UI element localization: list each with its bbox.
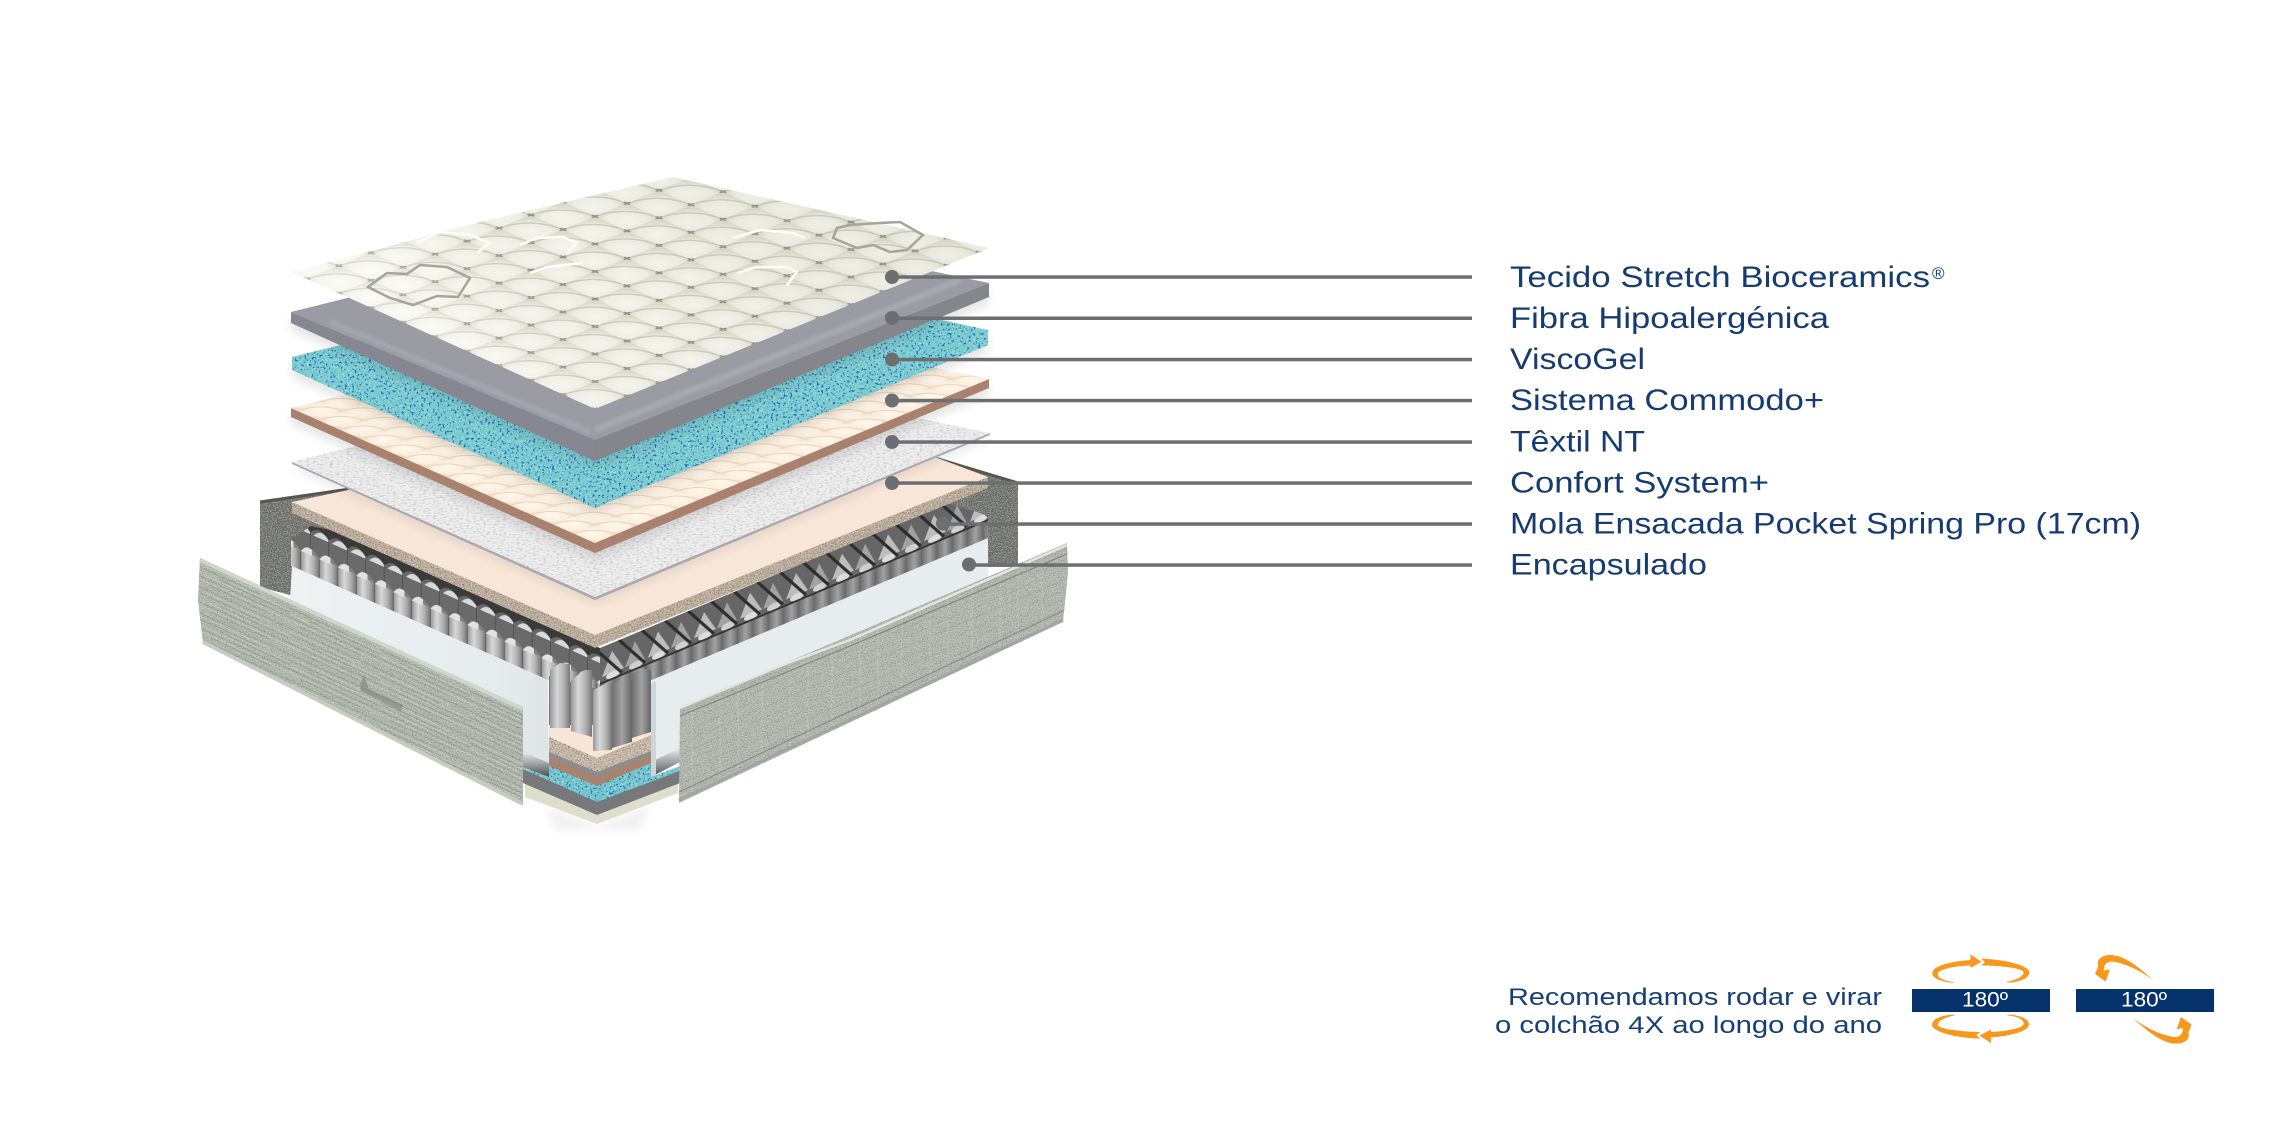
core brown layer — [549, 753, 651, 786]
base grey layer — [523, 769, 680, 815]
rotation recommendation text: Recomendamos rodar e virar — [1508, 984, 1882, 1011]
label: Fibra Hipoalergénica: Fibra Hipoalergénica — [1510, 302, 1829, 335]
label: ViscoGel: ViscoGel — [1510, 343, 1645, 376]
layer: Sistema Commodo+ — [291, 313, 989, 560]
label: Confort System+: Confort System+ — [1510, 466, 1769, 500]
rotate icon: horizontal 180: 180º — [1962, 988, 2008, 1012]
layer: ViscoGel — [292, 262, 988, 515]
encapsulation white left — [290, 566, 549, 777]
label: Sistema Commodo+: Sistema Commodo+ — [1510, 384, 1824, 417]
layer: Fibra Hipoalergénica — [291, 217, 989, 468]
rotate icon: horizontal 180 — [1912, 955, 2050, 1042]
leader lines and dots — [885, 270, 1472, 572]
back wall right — [935, 458, 1018, 567]
rotation recommendation text: o colchão 4X ao longo do ano — [1495, 1012, 1882, 1039]
rotation recommendation text — [1495, 984, 1882, 1039]
label: Tecido Stretch Bioceramics: ® — [1932, 264, 1945, 283]
brand mark — [360, 675, 403, 711]
back wall left — [260, 488, 350, 596]
layer labels — [1510, 261, 2141, 582]
spring band right — [600, 503, 988, 700]
spring band left — [291, 526, 600, 700]
core foam grain — [549, 734, 651, 772]
base teal layer — [523, 761, 680, 802]
core grey line — [549, 749, 651, 777]
flip icon: vertical 180: 180º — [2121, 988, 2167, 1012]
bottom shadow — [545, 805, 650, 830]
quilting ornaments — [368, 222, 923, 305]
flip icon: vertical 180 — [2076, 955, 2214, 1044]
base cream layer — [525, 783, 678, 824]
side fabric panel left — [198, 558, 523, 805]
layer: Têxtil NT — [292, 367, 990, 604]
layer: Confort System+ — [292, 400, 988, 648]
label: Têxtil NT: Têxtil NT — [1510, 426, 1645, 458]
side fabric panel right — [679, 543, 1068, 803]
mattress illustration — [198, 177, 1068, 830]
cut-away springs — [549, 663, 651, 751]
core foam top — [549, 720, 651, 758]
label: Mola Ensacada Pocket Spring Pro: Mola Ensacada Pocket Spring Pro (17cm) — [1510, 508, 2141, 540]
layer: Tecido Stretch Bioceramics — [292, 177, 989, 409]
encapsulation white right — [651, 538, 988, 777]
label: Encapsulado: Encapsulado — [1510, 548, 1707, 582]
label: Tecido Stretch Bioceramics: Tecido Stretch Bioceramics — [1510, 261, 1930, 294]
